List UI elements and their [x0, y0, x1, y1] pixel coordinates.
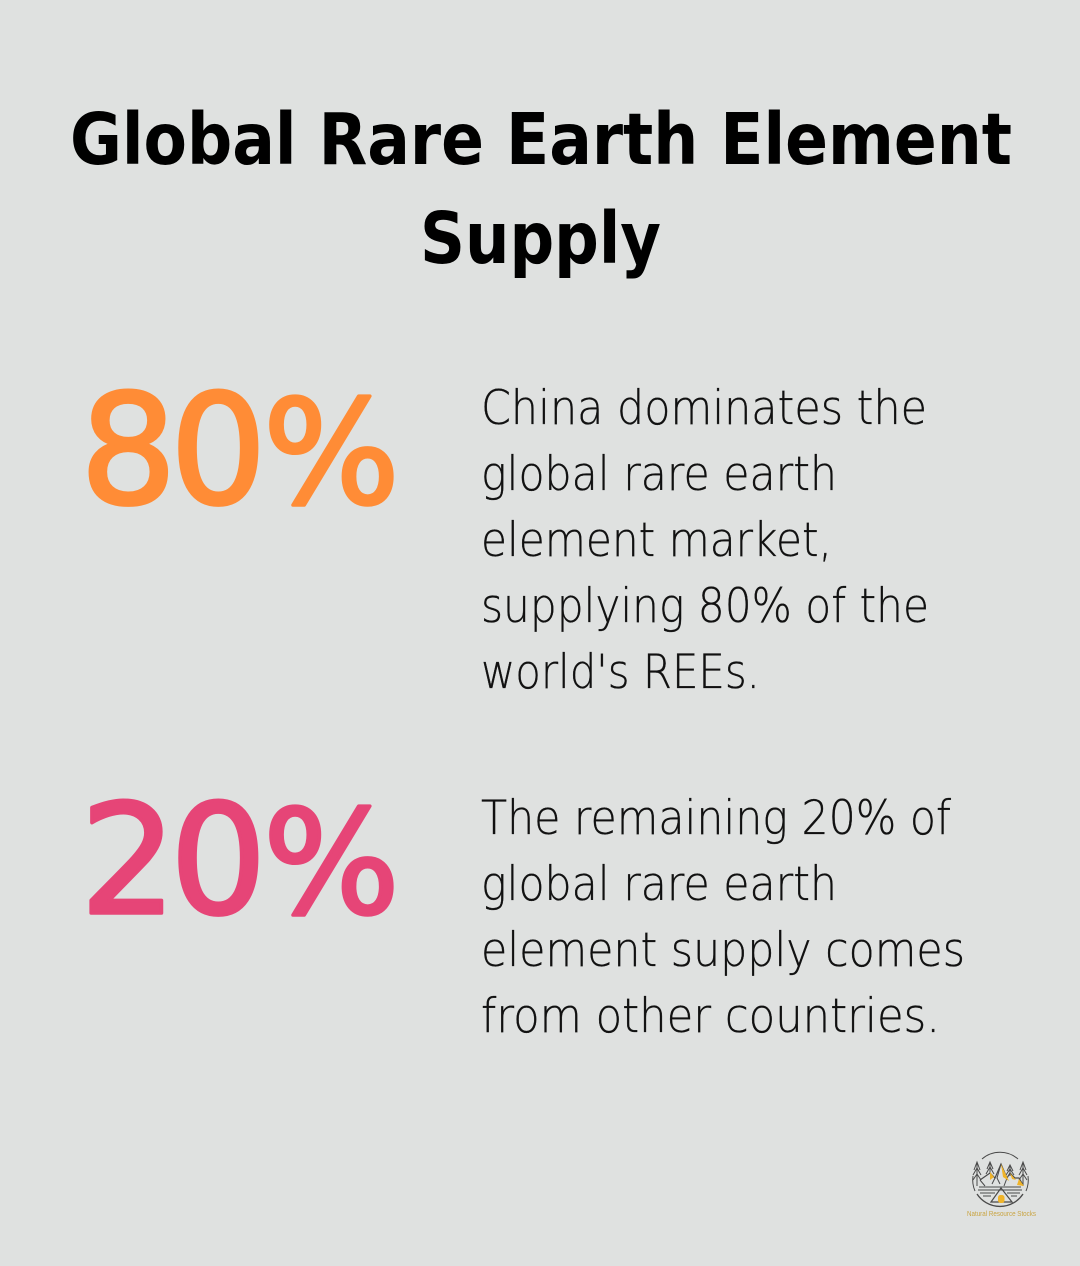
- logo: Natural Resource Stocks: [967, 1152, 1036, 1218]
- text block: other countries share: [481, 791, 965, 1044]
- text block: other countries share: global rare earth: [481, 857, 837, 912]
- text block: China share: China dominates the: [481, 381, 927, 436]
- logo caption: Natural Resource Stocks: [967, 1211, 1036, 1218]
- stat: 20%: 2: [80, 772, 177, 949]
- text block: China share: [481, 381, 929, 700]
- title: Supply: [420, 197, 661, 280]
- stat: 80%: %: [263, 369, 400, 537]
- title: [70, 98, 1012, 280]
- text block: other countries share: The remaining 20% of: [481, 791, 951, 846]
- text block: other countries share: from other countries.: [481, 989, 940, 1044]
- stat: 20%: 0: [170, 772, 267, 949]
- stat: 20%: %: [263, 779, 400, 947]
- icon: mountain badge: [973, 1152, 1028, 1206]
- text block: China share: world's REEs.: [481, 645, 760, 700]
- text block: China share: element market,: [481, 513, 832, 568]
- text block: China share: supplying 80% of the: [481, 579, 929, 634]
- stat: 80%: 0: [170, 362, 267, 539]
- text block: other countries share: element supply comes: [481, 923, 965, 978]
- stat: 80%: 8: [80, 362, 177, 539]
- text block: China share: global rare earth: [481, 447, 837, 502]
